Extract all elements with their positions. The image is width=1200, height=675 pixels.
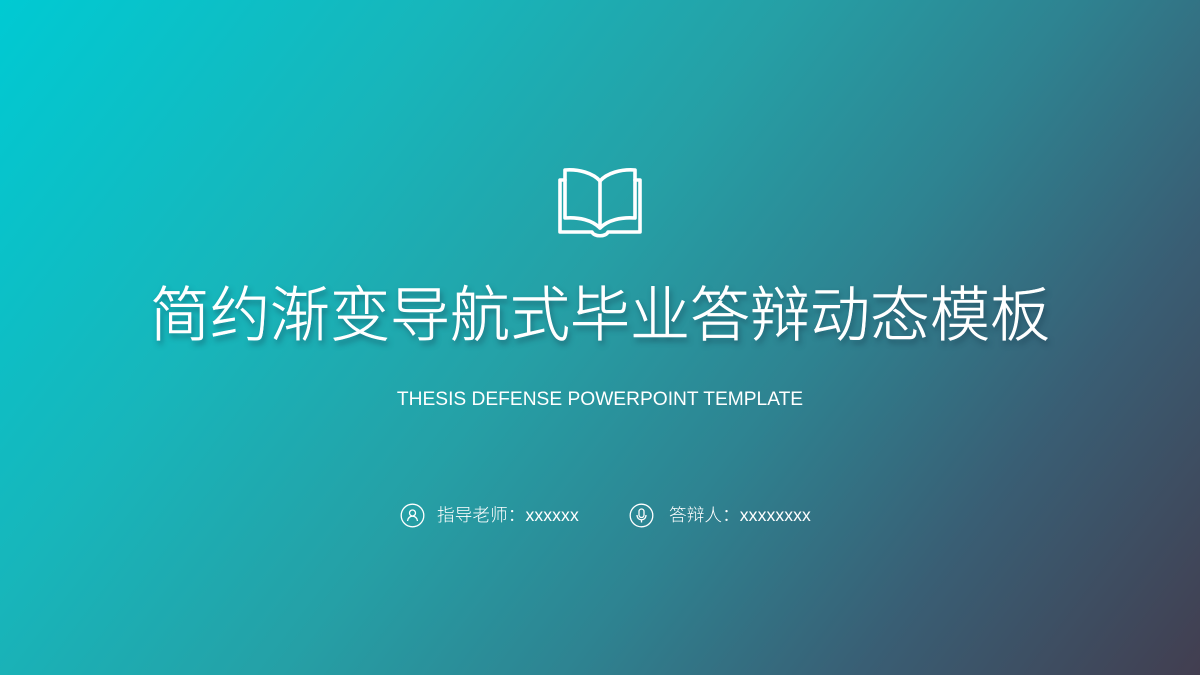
- respondent label: 答辩人：xxxxxxxx: [669, 505, 811, 525]
- icon: open book: [558, 168, 642, 238]
- icon: microphone: [630, 504, 654, 528]
- title: 简约渐变导航式毕业答辩动态模板: [150, 282, 1050, 349]
- advisor info: [400, 504, 579, 528]
- advisor label: 指导老师：xxxxxx: [437, 505, 579, 525]
- respondent info: [630, 504, 811, 528]
- subtitle: THESIS DEFENSE POWERPOINT TEMPLATE: [397, 389, 803, 410]
- icon: person: [400, 504, 424, 528]
